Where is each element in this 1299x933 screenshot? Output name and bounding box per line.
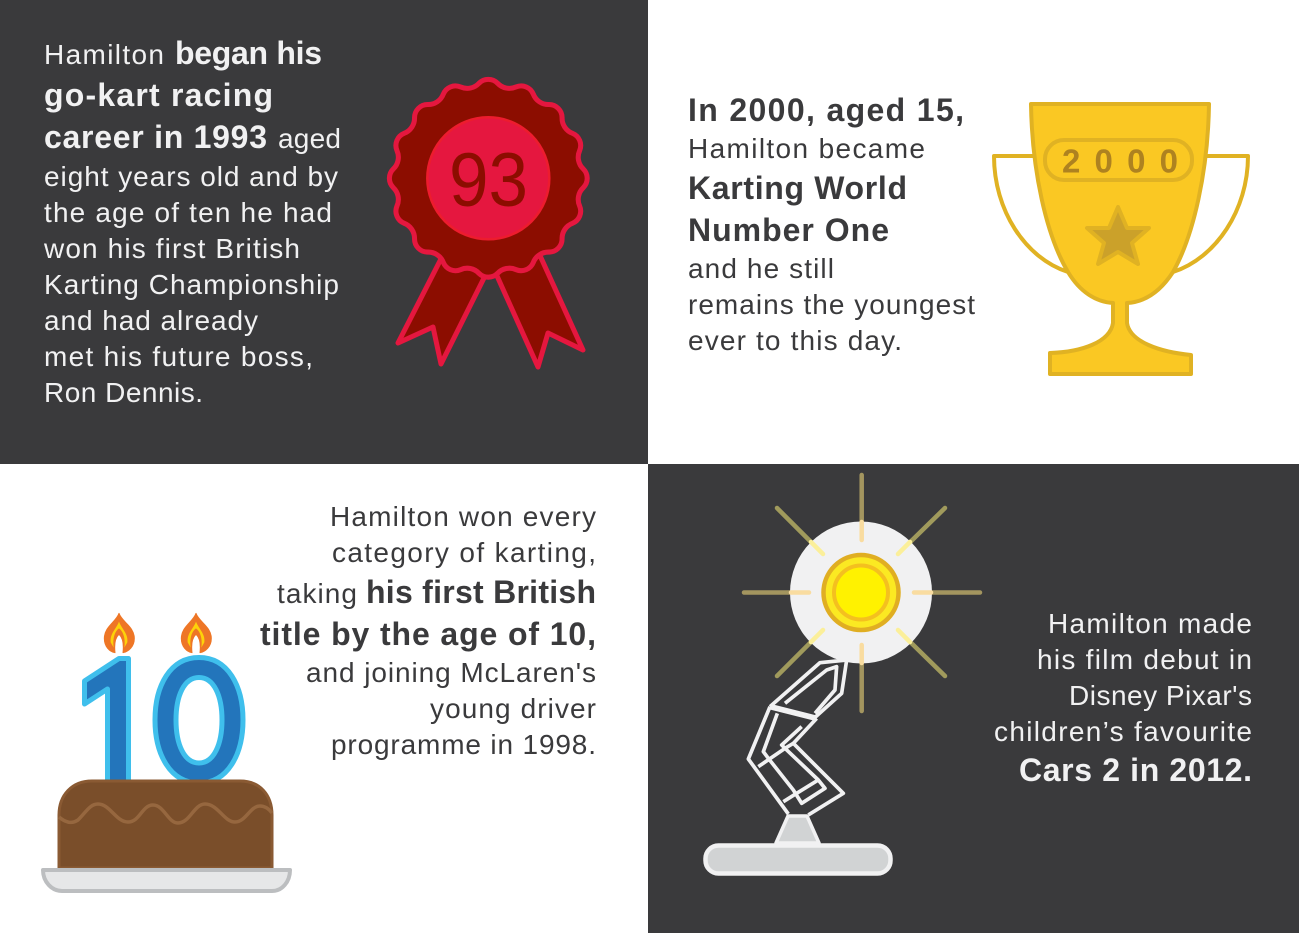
- trophy cup and base: [1031, 104, 1209, 374]
- trophy handles: [994, 156, 1248, 272]
- text block: first british title: title by the age of 10,: [260, 616, 596, 652]
- text block: first british title: Hamilton won every: [330, 501, 596, 532]
- text block: karting world number one: Hamilton became: [688, 133, 925, 164]
- text block: karting world number one: Number One: [688, 212, 889, 248]
- text block: film debut: Cars 2 in 2012.: [1019, 752, 1252, 788]
- lamp neck: [776, 816, 819, 843]
- trophy star: [1087, 207, 1149, 264]
- lamp light rays: [744, 475, 980, 711]
- rosette centre circle: [427, 117, 549, 239]
- text block: film debut: children’s favourite: [994, 716, 1252, 747]
- trophy plaque: [1045, 140, 1192, 180]
- text block: first british title: programme in 1998.: [331, 729, 596, 760]
- numeral one candle: [84, 658, 128, 782]
- text block: film debut: his film debut in: [1037, 644, 1252, 675]
- text block: first british title: young driver: [430, 693, 596, 724]
- text block: go-kart career: eight years old and by: [44, 161, 338, 192]
- panel: dark bottom right: [648, 464, 1299, 933]
- lamp rays over disc: [791, 522, 931, 663]
- text block: go-kart career: aged: [278, 123, 341, 154]
- text block: first british title: [260, 501, 596, 760]
- lamp bulb: [824, 555, 898, 630]
- text block: go-kart career: the age of ten he had: [44, 197, 332, 228]
- text block: film debut: Hamilton made: [1048, 608, 1252, 639]
- text block: go-kart career: won his first British: [43, 233, 300, 264]
- icon: trophy 2000: [994, 104, 1248, 374]
- plate: [43, 870, 290, 891]
- lamp light disc: [790, 522, 932, 664]
- text block: go-kart career: career in 1993: [44, 119, 267, 155]
- text block: first british title: category of karting,: [332, 537, 596, 568]
- icon: desk lamp: [706, 475, 980, 874]
- rosette number: 93: [449, 138, 528, 223]
- text block: go-kart career: Ron Dennis.: [44, 377, 203, 408]
- numeral zero candle: [155, 658, 243, 783]
- text block: go-kart career: go-kart racing: [44, 77, 273, 113]
- text block: karting world number one: remains the youngest: [688, 289, 975, 320]
- text block: film debut: Disney Pixar's: [1069, 680, 1252, 711]
- text block: first british title: taking: [277, 578, 357, 609]
- text block: go-kart career: and had already: [44, 305, 258, 336]
- text block: karting world number one: [688, 92, 975, 356]
- text block: first british title: his first British: [366, 574, 596, 610]
- rosette scalloped badge: [389, 79, 587, 277]
- lamp base: [706, 846, 890, 874]
- lamp arm: [748, 660, 847, 815]
- text block: go-kart career: Hamilton: [44, 39, 164, 70]
- trophy year: 2000: [1062, 142, 1178, 180]
- rosette ribbons: [398, 249, 583, 367]
- icon: birthday cake with candles: [43, 613, 290, 891]
- text block: go-kart career: began his: [175, 35, 322, 71]
- text block: karting world number one: ever to this day.: [688, 325, 902, 356]
- text block: film debut: [994, 608, 1252, 788]
- flame left: [104, 613, 134, 653]
- text block: go-kart career: Karting Championship: [44, 269, 339, 300]
- text block: go-kart career: [43, 35, 341, 408]
- text block: go-kart career: met his future boss,: [44, 341, 313, 372]
- flame right: [181, 613, 211, 653]
- cake: [59, 781, 272, 868]
- text block: karting world number one: In 2000, aged 15,: [688, 92, 964, 128]
- icon: rosette 93: [389, 79, 587, 367]
- text block: karting world number one: and he still: [688, 253, 834, 284]
- text block: first british title: and joining McLaren's: [306, 657, 596, 688]
- text block: karting world number one: Karting World: [688, 170, 907, 206]
- cake icing: [59, 804, 272, 823]
- panel: dark top left: [0, 0, 648, 464]
